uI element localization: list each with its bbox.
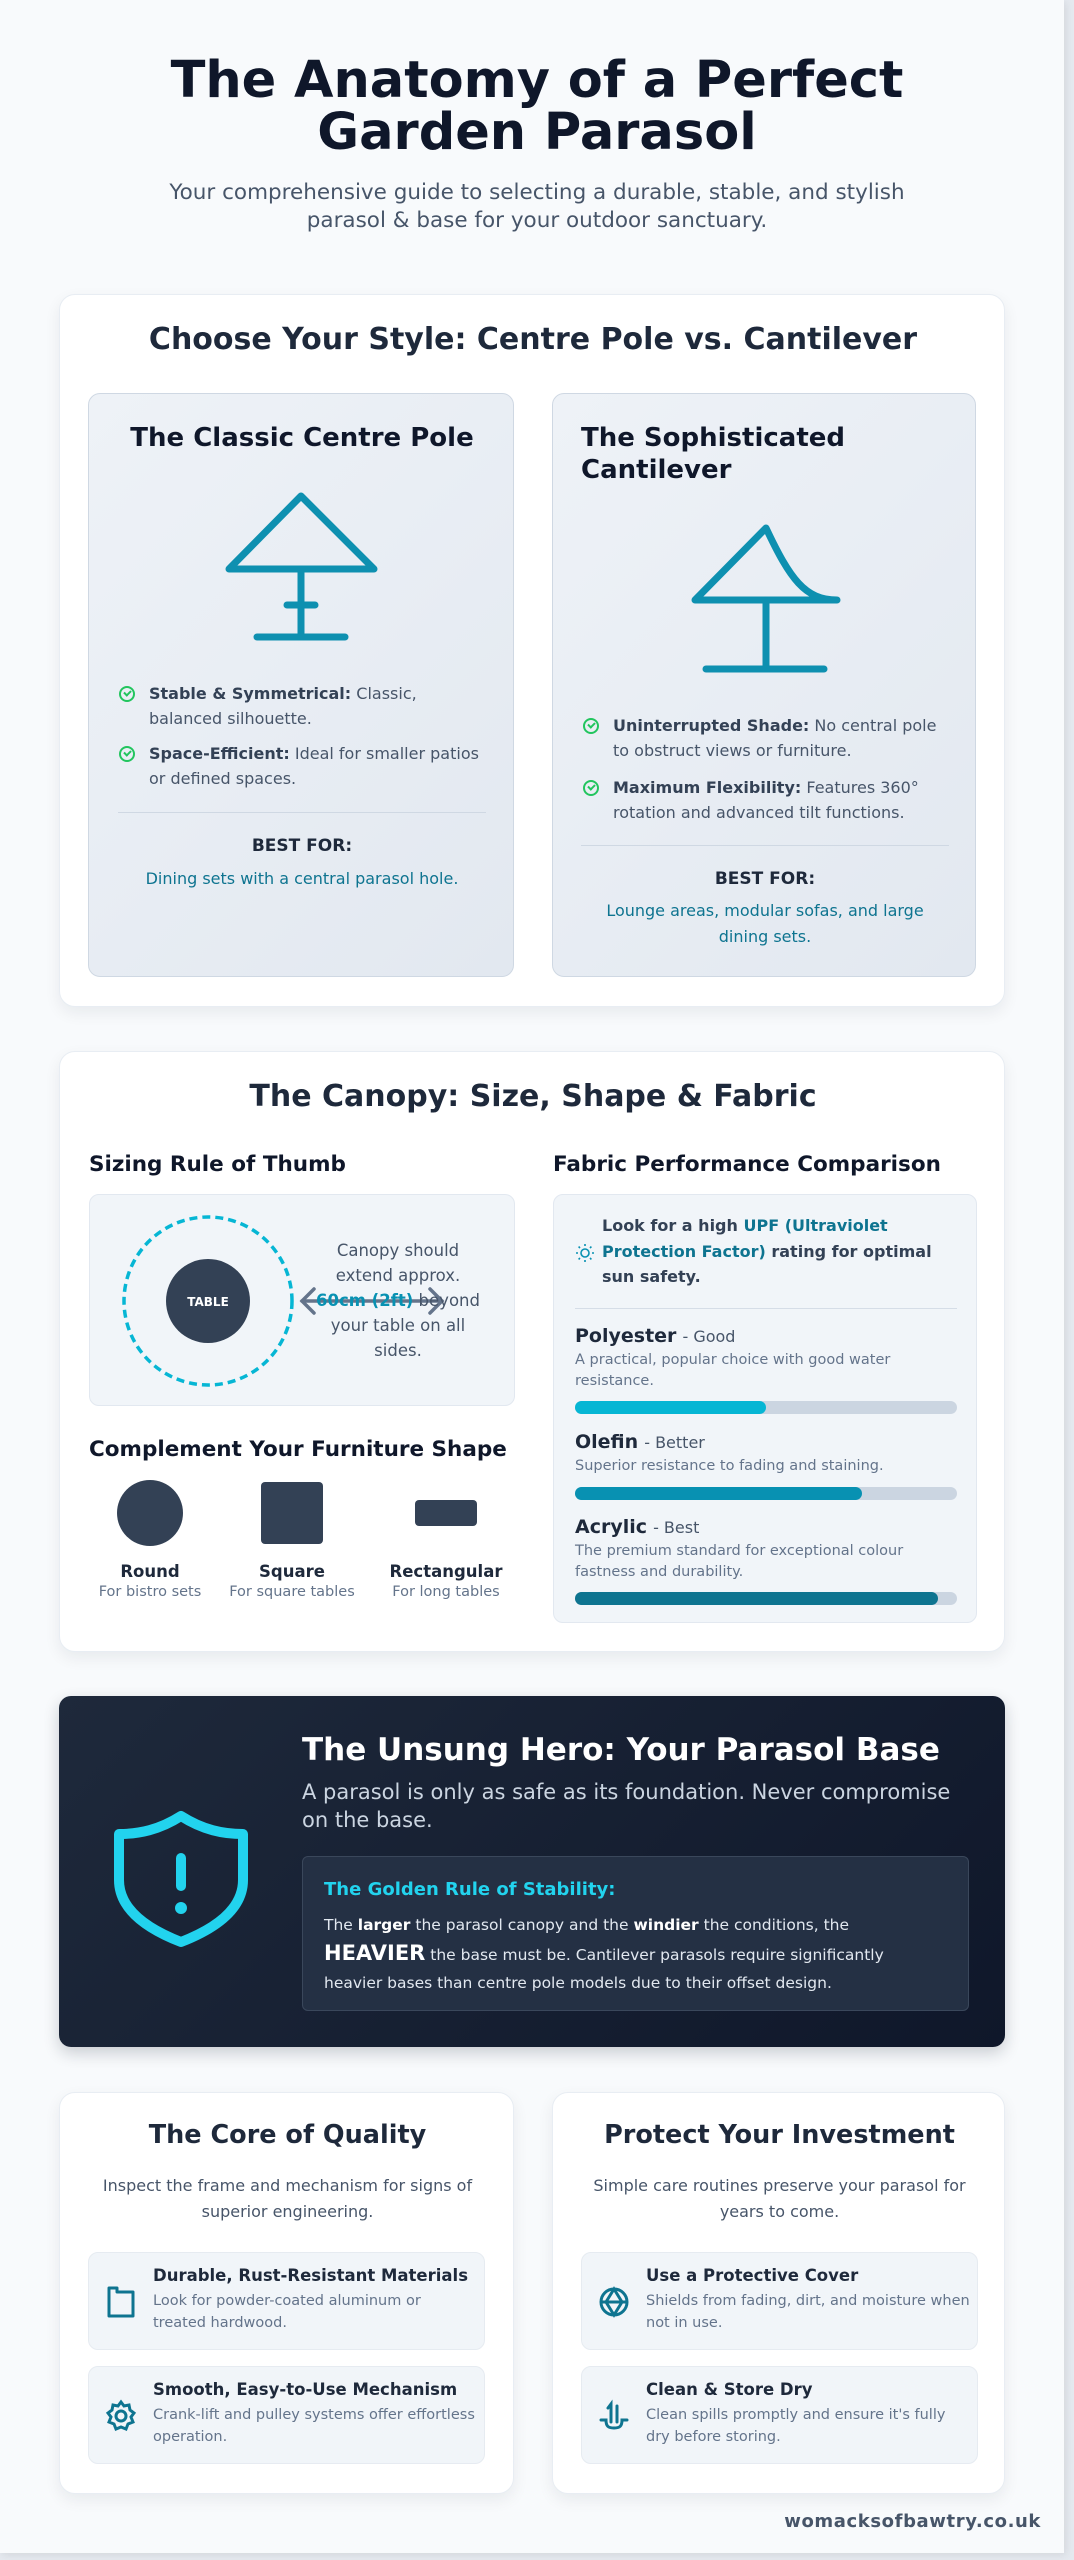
UPF note: Look for a high UPF (Ultraviolet Protection Factor) rating for optimal sun safety. (602, 1216, 932, 1286)
fabric: polyester: A practical, popular choice with good water resistance. (575, 1352, 890, 1389)
title: The Anatomy of a Perfect (171, 51, 903, 110)
fabric: olefin (575, 1431, 957, 1500)
heading: base: The Unsung Hero: Your Parasol Base (302, 1732, 940, 1768)
callout: golden rule: The Golden Rule of Stability: (324, 1879, 615, 1900)
subtitle: Your comprehensive guide to selecting a durable, stable, and stylish parasol & base for your outdoor sanctuary. (169, 180, 905, 233)
callout: golden rule (302, 1856, 969, 2011)
heading: quality: The Core of Quality (149, 2120, 426, 2150)
item: mechanism: Crank-lift and pulley systems offer effortless (153, 2407, 475, 2423)
heading: cantilever: Cantilever (581, 455, 731, 485)
bullets: to obstruct views or furniture. (613, 741, 852, 760)
bullets: Stable & Symmetrical: Classic, (149, 684, 417, 703)
base subtitle: A parasol is only as safe as its foundation. Never compromise on the base. (302, 1780, 950, 1832)
shape: rectangular: Rectangular (390, 1562, 502, 1581)
shape: round (99, 1480, 201, 1600)
sizing text: sides. (374, 1341, 422, 1360)
panel: core of quality (59, 2092, 514, 2494)
title: Garden Parasol (317, 103, 757, 162)
item: materials (88, 2252, 485, 2350)
icon: shield warning (114, 1810, 248, 1947)
fabric: acrylic: The premium standard for exceptional colour fastness and durability. (575, 1543, 903, 1580)
item: cover: not in use. (646, 2315, 722, 2331)
panel: cantilever: Lounge areas, modular sofas, and large (606, 901, 924, 920)
best for: BEST FOR: (715, 869, 815, 889)
fabric: acrylic: Acrylic - Best (575, 1516, 699, 1538)
sizing diagram: TABLE (187, 1295, 229, 1309)
title (170, 51, 903, 162)
icon: sun (576, 1244, 594, 1262)
sizing diagram (89, 1194, 515, 1406)
sizing text: extend approx. (336, 1266, 460, 1285)
item: materials: treated hardwood. (153, 2315, 287, 2331)
heading: cantilever (581, 423, 845, 485)
panel: canopy (59, 1051, 1005, 1652)
fabric: olefin: Olefin - Better (575, 1431, 705, 1453)
panel: choose your style (59, 294, 1005, 1007)
shape: rectangular: For long tables (392, 1584, 500, 1600)
bullets: Uninterrupted Shade: No central pole (613, 716, 936, 735)
fabric: olefin: Superior resistance to fading and staining. (575, 1458, 884, 1474)
panel: cantilever (552, 393, 976, 977)
subheading: sizing: Sizing Rule of Thumb (89, 1152, 346, 1177)
item: cover: Use a Protective Cover (646, 2266, 858, 2285)
item: cover (581, 2252, 978, 2350)
best for: BEST FOR: (252, 836, 352, 856)
panel: centre pole: or defined spaces. (149, 769, 296, 788)
icon: cantilever parasol (692, 524, 840, 672)
bullets (119, 684, 417, 728)
panel: protect investment (552, 2092, 1005, 2494)
panel: cantilever: rotation and advanced tilt functions. (613, 803, 905, 822)
protect description: Simple care routines preserve your parasol for years to come. (593, 2176, 966, 2221)
shape: rectangular (390, 1500, 502, 1600)
item: mechanism: Smooth, Easy-to-Use Mechanism (153, 2380, 457, 2399)
subheading: fabric: Fabric Performance Comparison (553, 1152, 941, 1177)
panel: cantilever: Maximum Flexibility: Features 360° (613, 778, 919, 797)
sizing text: your table on all (331, 1316, 465, 1335)
panel: centre pole: Dining sets with a central parasol hole. (146, 869, 458, 888)
heading: centre pole: The Classic Centre Pole (130, 423, 474, 453)
icon: centre pole parasol (226, 492, 378, 640)
quality description: Inspect the frame and mechanism for signs of superior engineering. (103, 2176, 472, 2221)
item: clean & store: dry before storing. (646, 2429, 781, 2445)
heading: cantilever: The Sophisticated (581, 423, 845, 453)
shape: square: For square tables (229, 1584, 355, 1600)
sizing text (316, 1241, 480, 1360)
fabric: polyester: Polyester - Good (575, 1325, 735, 1347)
bullets (583, 716, 936, 760)
heading: protect: Protect Your Investment (604, 2120, 955, 2150)
bullets: balanced silhouette. (149, 709, 312, 728)
panel: centre pole: Space-Efficient: Ideal for smaller patios (149, 744, 479, 763)
fabric: polyester (575, 1325, 957, 1414)
fabric: acrylic (574, 1516, 957, 1605)
panel: parasol base (59, 1696, 1005, 2047)
heading: choose your style: Choose Your Style: Centre Pole vs. Cantilever (149, 322, 917, 357)
item: cover: Shields from fading, dirt, and moisture when (646, 2293, 970, 2309)
item: mechanism: operation. (153, 2429, 227, 2445)
callout: golden rule: The larger the parasol canopy and the windier the conditions, the HEAVIER the base must be. Cantilever parasols require significantly heavier bases than centre pole models due to their offset design. (324, 1916, 884, 1992)
shape: round: For bistro sets (99, 1584, 201, 1600)
item: materials: Look for powder-coated aluminum or (153, 2293, 421, 2309)
sizing text: 60cm (2ft) beyond (316, 1291, 480, 1310)
item: clean & store: Clean & Store Dry (646, 2380, 812, 2399)
item: materials: Durable, Rust-Resistant Materials (153, 2266, 468, 2285)
item: mechanism (88, 2366, 485, 2464)
subheading: furniture shape: Complement Your Furniture Shape (89, 1437, 507, 1462)
item: clean & store: Clean spills promptly and ensure it's fully (646, 2407, 945, 2423)
panel: cantilever: dining sets. (719, 927, 811, 946)
sizing text: Canopy should (337, 1241, 459, 1260)
shape: round: Round (120, 1562, 180, 1581)
fabric comparison (553, 1194, 977, 1623)
item: clean & store (581, 2366, 978, 2464)
shape: square (229, 1482, 355, 1600)
shape: square: Square (259, 1562, 325, 1581)
heading: canopy: The Canopy: Size, Shape & Fabric (249, 1079, 817, 1114)
panel: centre pole (88, 393, 514, 977)
footer: website: womacksofbawtry.co.uk (784, 2511, 1041, 2532)
